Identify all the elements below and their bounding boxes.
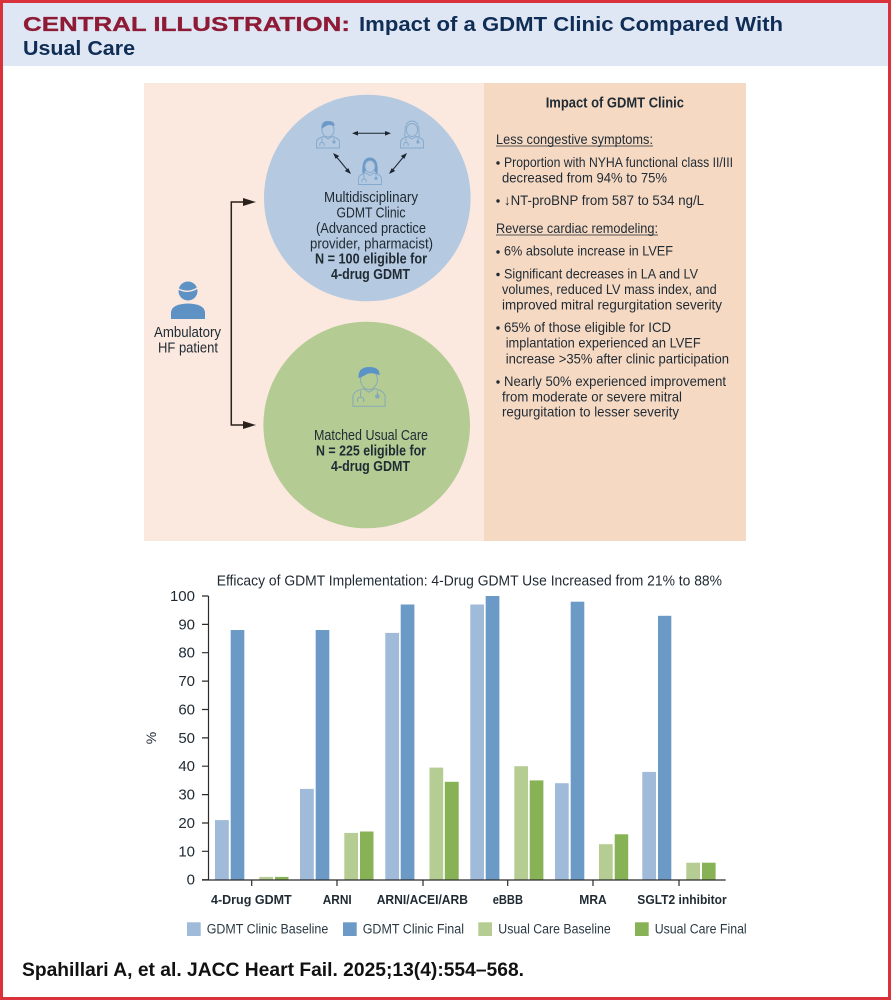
section: reverse cardiac remodeling: [496, 220, 729, 420]
y axis with ticks and labels: 60: [178, 702, 195, 718]
text: clinic description: GDMT Clinic: [336, 206, 406, 222]
section: reverse cardiac remodeling: volumes, reduced LV mass index, and: [502, 281, 717, 297]
section: reverse cardiac remodeling: Significant decreases in LA and LV: [504, 265, 699, 281]
text: clinic description: (Advanced practice: [316, 221, 426, 237]
text: usual care description: Matched Usual Care: [314, 428, 428, 444]
x axis with ticks and labels: eBBB: [493, 892, 523, 907]
arrows: team communication: [333, 131, 407, 174]
y axis with ticks and labels: 90: [178, 616, 195, 633]
label: ambulatory HF patient: HF patient: [158, 341, 218, 357]
section: less congestive symptoms: ↓NT-proBNP from 587 to 534 ng/L: [504, 192, 704, 208]
text: usual care description: N = 225 eligible for: [316, 443, 426, 459]
bars: 4-drug GDMT: [215, 630, 288, 880]
y axis with ticks and labels: %: [143, 732, 159, 744]
y axis with ticks and labels: 50: [178, 730, 195, 747]
x axis with ticks and labels: ARNI/ACEI/ARB: [377, 892, 468, 907]
section: reverse cardiac remodeling: 65% of those eligible for ICD: [504, 319, 671, 335]
text: clinic description: Multidisciplinary: [324, 190, 419, 206]
circle: matched usual care: [263, 322, 470, 528]
section: less congestive symptoms: Proportion with NYHA functional class II/III: [504, 154, 733, 170]
section: less congestive symptoms: decreased from 94% to 75%: [502, 170, 667, 186]
y axis with ticks and labels: 80: [178, 645, 195, 662]
panel: study design: [144, 83, 484, 541]
text: usual care description: [314, 428, 428, 475]
legend: Usual Care Baseline: [498, 921, 611, 936]
y axis with ticks and labels: 10: [178, 843, 195, 860]
label: ambulatory HF patient: Ambulatory: [154, 325, 222, 341]
legend: Usual Care Final: [655, 921, 747, 936]
section: reverse cardiac remodeling: increase >35% after clinic participation: [506, 350, 729, 366]
section: less congestive symptoms: Less congestive symptoms:: [496, 131, 653, 147]
y axis with ticks and labels: 20: [178, 815, 195, 832]
text: clinic description: 4-drug GDMT: [331, 267, 410, 283]
section: reverse cardiac remodeling: Nearly 50% experienced improvement: [504, 373, 726, 389]
bars: SGLT2 inhibitor: [642, 616, 716, 880]
x axis with ticks and labels: [202, 880, 727, 907]
section: reverse cardiac remodeling: from moderate or severe mitral: [502, 388, 682, 404]
x axis with ticks and labels: 4-Drug GDMT: [211, 892, 292, 907]
icon: clinician bottom centre: [358, 158, 382, 184]
bars: MRA: [555, 602, 628, 880]
y axis with ticks and labels: 0: [187, 872, 195, 889]
bars: ARNI: [300, 630, 374, 880]
text: usual care description: 4-drug GDMT: [331, 459, 410, 475]
y axis with ticks and labels: 70: [178, 673, 195, 690]
circle: multidisciplinary GDMT clinic: [264, 95, 471, 301]
header band with title: [3, 3, 888, 66]
icon: ambulatory patient: [171, 282, 205, 319]
y axis with ticks and labels: 100: [170, 588, 195, 605]
legend: [187, 921, 747, 936]
text: clinic description: [310, 190, 433, 283]
y axis with ticks and labels: 40: [178, 758, 195, 775]
bar chart: GDMT use by drug class: [143, 588, 727, 907]
icon: usual care physician: [353, 367, 385, 406]
legend: GDMT Clinic Final: [363, 921, 464, 936]
icon: clinician top left: [316, 121, 340, 148]
panel heading: Impact of GDMT Clinic: [546, 96, 684, 112]
header band with title: CENTRAL ILLUSTRATION:: [23, 13, 350, 36]
section: reverse cardiac remodeling: implantation experienced an LVEF: [506, 335, 701, 351]
bars: eBBB: [470, 596, 543, 880]
icon: clinician top right: [400, 121, 424, 148]
label: ambulatory HF patient: [154, 325, 222, 357]
section: less congestive symptoms: [496, 131, 733, 208]
section: reverse cardiac remodeling: regurgitation to lesser severity: [502, 404, 679, 420]
x axis with ticks and labels: MRA: [579, 892, 607, 907]
citation: Spahillari A, et al. JACC Heart Fail. 2025;13(4):554–568.: [22, 960, 524, 981]
chart title: Efficacy of GDMT Implementation: 4-Drug GDMT Use Increased from 21% to 88%: [217, 574, 722, 590]
legend: GDMT Clinic Baseline: [207, 921, 328, 936]
x axis with ticks and labels: ARNI: [323, 892, 352, 907]
section: reverse cardiac remodeling: improved mitral regurgitation severity: [502, 296, 722, 312]
text: clinic description: N = 100 eligible for: [315, 252, 427, 268]
arrow: patient to both arms: [231, 198, 256, 429]
header band with title: Usual Care: [23, 37, 135, 60]
panel: impact of GDMT clinic: [484, 83, 746, 541]
y axis with ticks and labels: 30: [178, 787, 195, 804]
y axis with ticks and labels: [143, 588, 208, 889]
section: reverse cardiac remodeling: 6% absolute increase in LVEF: [504, 243, 673, 259]
x axis with ticks and labels: SGLT2 inhibitor: [637, 892, 727, 907]
header band with title: Impact of a GDMT Clinic Compared With: [359, 13, 783, 36]
section: reverse cardiac remodeling: Reverse cardiac remodeling:: [496, 220, 658, 236]
text: clinic description: provider, pharmacist): [310, 236, 433, 252]
bars: ARNI/ACEI/ARB: [385, 604, 459, 880]
